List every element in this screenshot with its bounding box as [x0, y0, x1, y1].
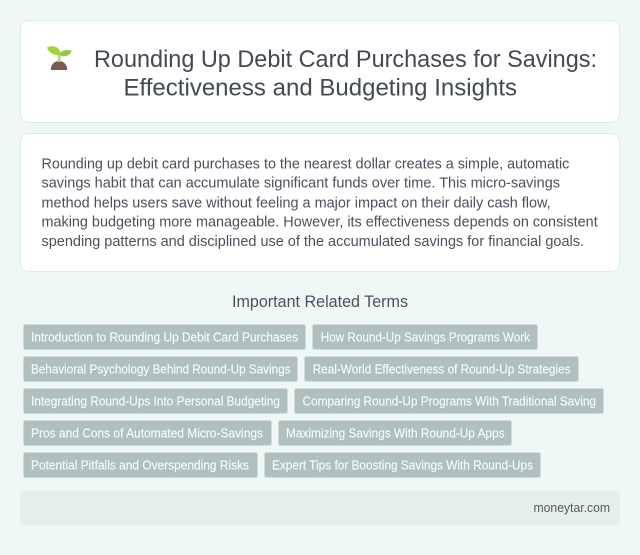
tag: Real-World Effectiveness of Round-Up Strategies	[313, 362, 570, 376]
tag	[24, 356, 298, 382]
summary text: savings habit that can accumulate significant funds over time. This micro-savings	[42, 175, 560, 192]
tag: Behavioral Psychology Behind Round-Up Savings	[31, 362, 290, 376]
tag	[24, 324, 306, 350]
related terms tags	[24, 324, 604, 478]
icon: seedling	[47, 46, 72, 70]
tag: Comparing Round-Up Programs With Traditional Saving	[302, 394, 596, 408]
tag: Potential Pitfalls and Overspending Risks	[31, 458, 249, 472]
footer	[20, 491, 620, 525]
tag: Integrating Round-Ups Into Personal Budgeting	[31, 394, 280, 408]
summary text: spending patterns and disciplined use of the accumulated savings for financial goals.	[42, 233, 584, 250]
tag	[264, 452, 540, 478]
tag: Expert Tips for Boosting Savings With Round-Ups	[272, 458, 533, 472]
summary text	[42, 155, 598, 250]
tag	[24, 388, 288, 414]
summary text: method helps users save without feeling a major impact on their daily cash flow,	[42, 194, 551, 211]
tag	[304, 356, 578, 382]
title: Rounding Up Debit Card Purchases for Savings:	[94, 46, 597, 73]
tag	[24, 420, 272, 446]
summary text: making budgeting more manageable. However, its effectiveness depends on consistent	[42, 214, 598, 231]
summary text: Rounding up debit card purchases to the nearest dollar creates a simple, automatic	[42, 155, 570, 172]
tag: Pros and Cons of Automated Micro-Savings	[31, 426, 263, 440]
tag: Maximizing Savings With Round-Up Apps	[286, 426, 504, 440]
tag: How Round-Up Savings Programs Work	[321, 330, 531, 344]
heading: important related terms: Important Related Terms	[232, 293, 408, 311]
panel: summary card	[20, 134, 620, 272]
panel: title card	[20, 20, 620, 122]
tag	[294, 388, 604, 414]
footer source: moneytar.com	[534, 500, 610, 515]
tag	[278, 420, 512, 446]
title: Effectiveness and Budgeting Insights	[124, 74, 517, 102]
tag: Introduction to Rounding Up Debit Card Purchases	[31, 330, 298, 344]
tag	[24, 452, 258, 478]
tag	[312, 324, 538, 350]
title	[94, 46, 597, 102]
